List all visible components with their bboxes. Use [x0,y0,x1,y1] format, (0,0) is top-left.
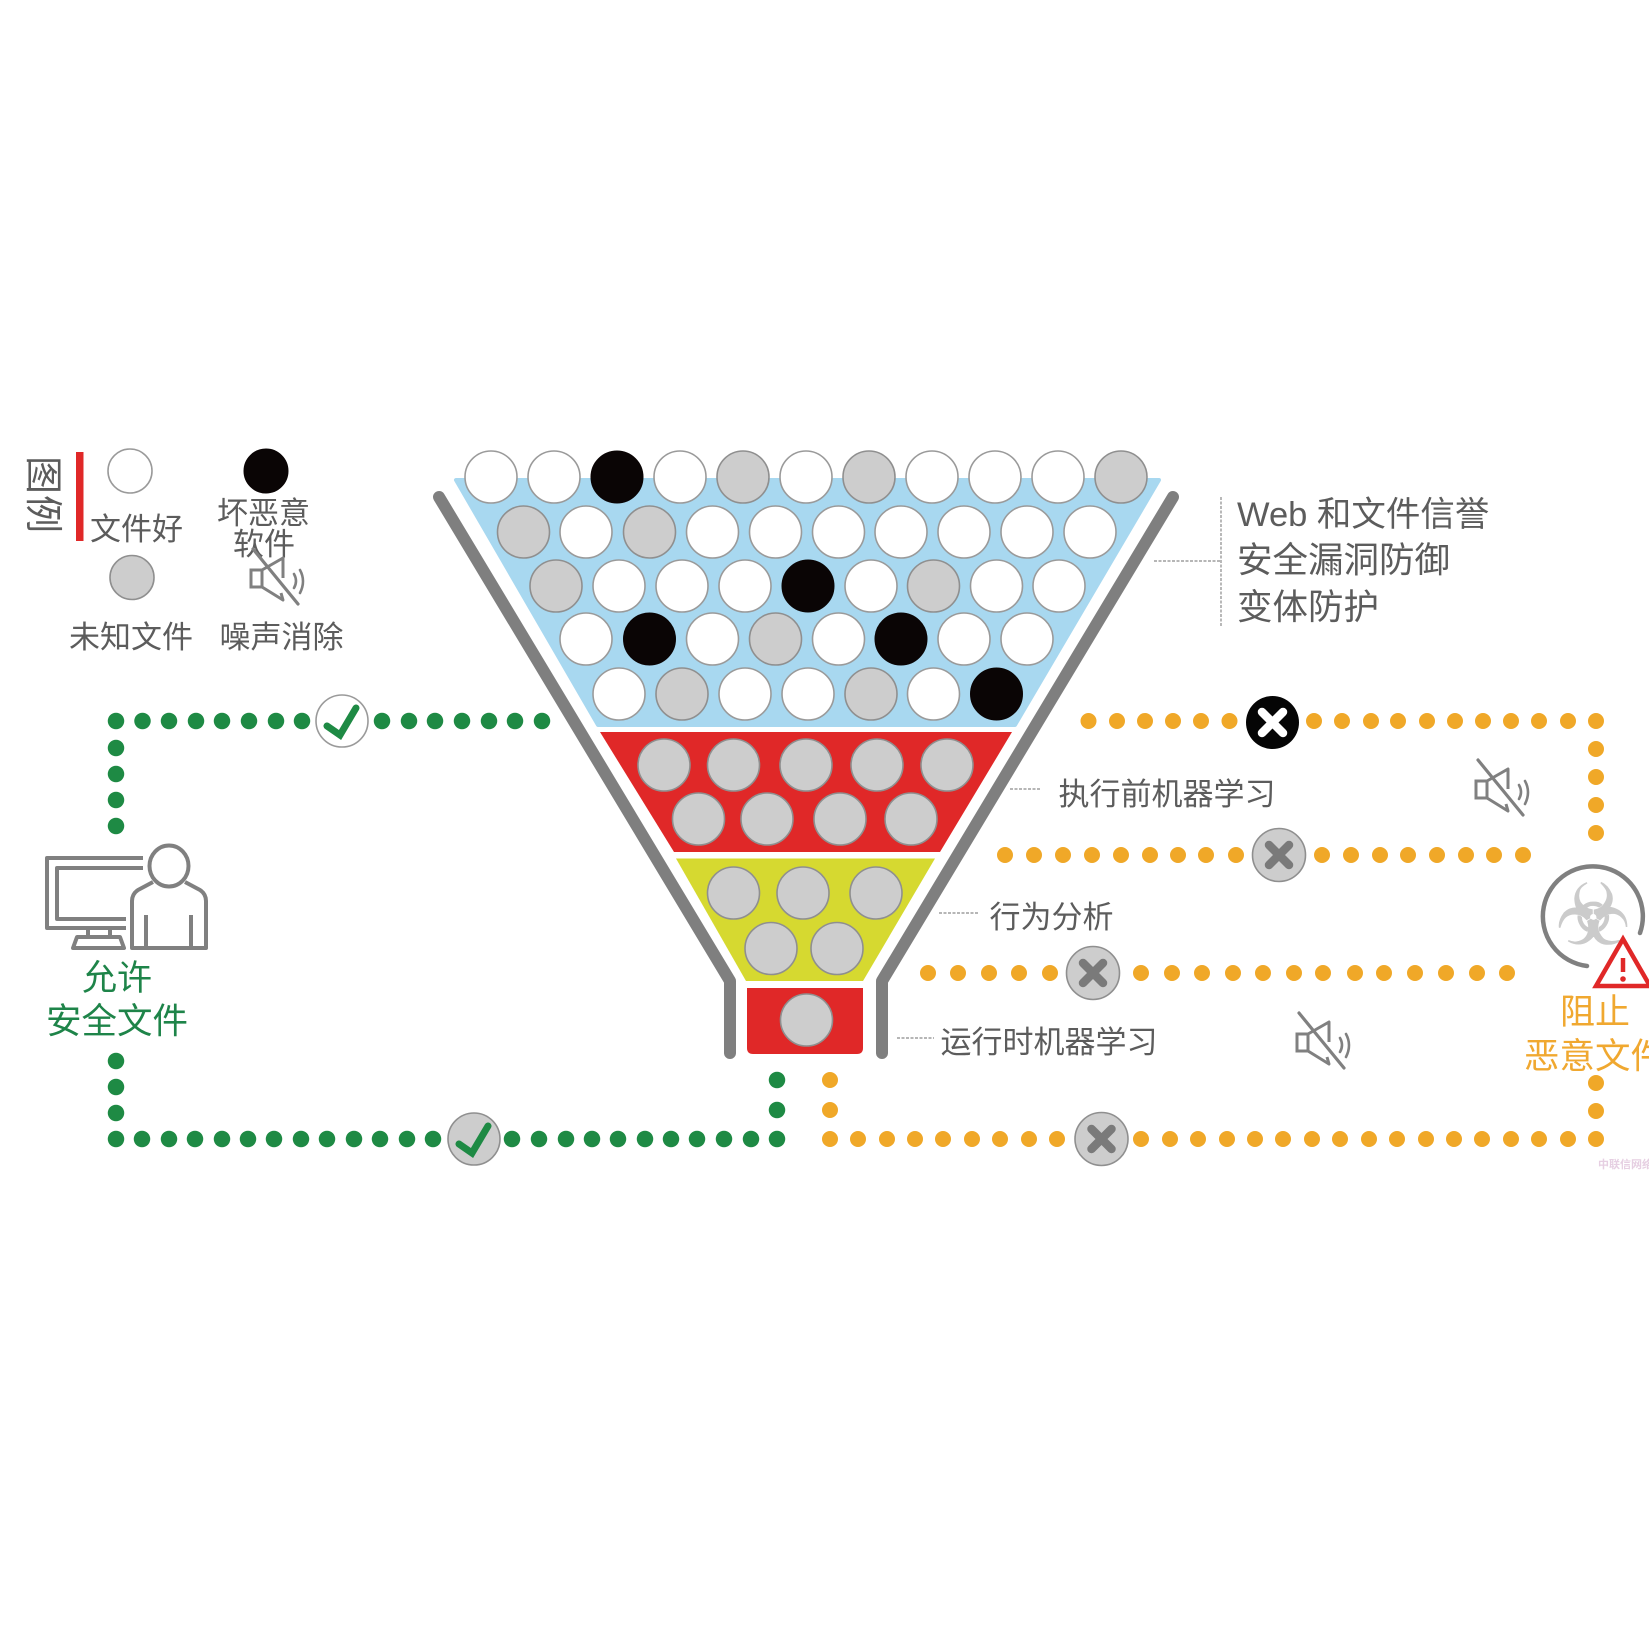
layer: web reputation (blue) [456,451,1159,725]
legend: unknown file: 未知文件 [69,620,193,655]
x badge: pre-execution block [1252,828,1306,882]
funnel right wall [882,497,1173,1053]
legend red bar [76,452,84,541]
label: allow safe files: 允许 [82,959,152,998]
x badge: behavior block [1066,946,1120,1000]
callout: runtime ML: 运行时机器学习 [940,1025,1158,1060]
layer: runtime ML (red) [747,988,863,1054]
orange dotted path: blocked files [830,721,1596,1139]
green dotted path: allowed files [116,721,777,1139]
callout: web reputation labels: 变体防护 [1237,587,1379,627]
icon: noise cancellation upper [1476,760,1528,815]
legend: noise cancellation: 噪声消除 [220,620,344,655]
funnel left wall [439,497,730,1053]
label: allow safe files [46,959,188,1041]
icon: biohazard with warning: ☣ [1555,866,1631,964]
check: bottom passed [448,1113,500,1165]
label: block malicious files: 阻止 [1560,993,1630,1032]
legend: malware: 软件 [233,527,295,562]
x badge: runtime block [1075,1112,1128,1166]
icon: noise cancellation lower [1297,1013,1349,1068]
label: block malicious files [1524,993,1649,1076]
icon: computer user [47,846,206,948]
legend: good file: 文件好 [90,512,183,547]
legend: good file [90,449,183,547]
callout: pre-execution ML: 执行前机器学习 [1058,777,1276,812]
funnel [439,451,1173,1054]
callout: web reputation labels: 安全漏洞防御 [1237,540,1450,580]
callout: web reputation labels [1154,496,1489,627]
icon: biohazard with warning [1543,866,1649,986]
legend: malware: 坏恶意 [217,496,310,531]
check: top passed [316,695,368,747]
label: allow safe files: 安全文件 [46,1001,188,1041]
callout: web reputation labels: Web 和文件信誉 [1237,496,1489,534]
legend: unknown file [69,556,193,655]
legend title: 图例 [21,456,63,534]
legend: noise cancellation [220,549,344,655]
callout: behavior analysis: 行为分析 [990,900,1114,935]
x badge: malware blocked [1246,696,1299,749]
legend [21,449,344,655]
layer: behavior analysis (yellow) [676,858,935,981]
layer: pre-execution ML (red) [600,732,1012,852]
legend: malware [217,449,310,562]
